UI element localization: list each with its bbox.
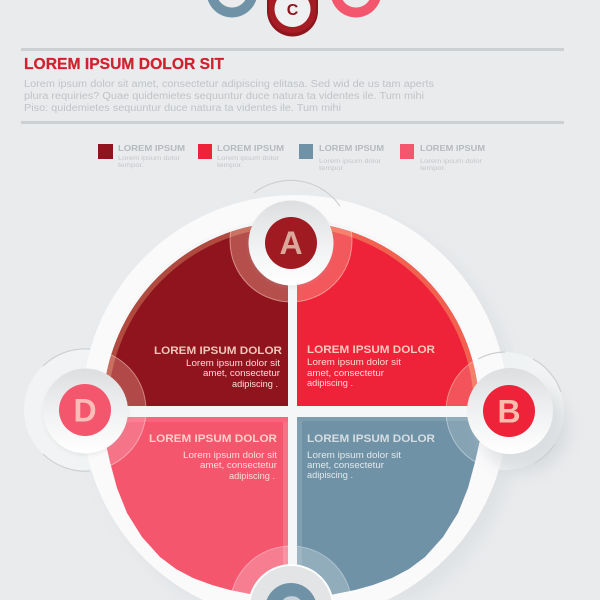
panel text: dark red bbox=[154, 345, 282, 389]
panel text: dark red: amet, consectetur bbox=[203, 368, 280, 378]
legend item: blue: Lorem ipsum dolor bbox=[319, 158, 382, 165]
ring shadow bbox=[93, 205, 519, 600]
panel text: dark red: Lorem ipsum dolor sit bbox=[186, 358, 281, 368]
rule bottom bbox=[21, 121, 564, 124]
legend item: pink bbox=[400, 143, 485, 172]
panel text: red bbox=[307, 344, 435, 388]
panel text: blue: LOREM IPSUM DOLOR bbox=[307, 433, 435, 445]
badge: C: C bbox=[287, 2, 299, 19]
quadrant chart bbox=[103, 222, 482, 600]
legend item: red: LOREM IPSUM bbox=[217, 143, 284, 153]
badge: A bbox=[230, 180, 352, 302]
intro paragraph: Lorem ipsum dolor sit amet, consectetur adipiscing elitasa. Sed wid de us tam aperts bbox=[24, 79, 434, 90]
quadrant: pink bbox=[103, 417, 288, 600]
intro paragraph: Piso: quidemietes sequuntur duce natura ta videntes ile. Tum mihi bbox=[24, 103, 341, 114]
panel text: dark red: adipiscing . bbox=[232, 379, 278, 389]
top partial badges bbox=[208, 0, 380, 36]
title: LOREM IPSUM DOLOR SIT bbox=[24, 56, 224, 73]
panel text: pink: adipiscing . bbox=[229, 471, 275, 481]
legend item: red bbox=[198, 143, 284, 169]
legend item: dark red: Lorem ipsum dolor bbox=[118, 155, 181, 162]
badge: B: B bbox=[497, 394, 521, 430]
panel text: pink bbox=[149, 433, 278, 481]
quadrant: blue bbox=[297, 417, 482, 600]
panel text: blue: amet, consectetur bbox=[307, 460, 384, 470]
legend item: dark red bbox=[98, 143, 185, 169]
intro paragraph: plura requiries? Quae quidemietes sequuntur duce natura ta videntes ile. Tum mihi bbox=[24, 91, 424, 102]
legend item: blue: tempor. bbox=[319, 165, 345, 172]
panel text: red: LOREM IPSUM DOLOR bbox=[307, 344, 435, 356]
rule top bbox=[21, 48, 564, 51]
badge ring: blue bbox=[208, 0, 256, 17]
badge: D: D bbox=[73, 392, 97, 428]
panel text: red: Lorem ipsum dolor sit bbox=[307, 357, 402, 367]
legend item: pink: tempor. bbox=[420, 165, 446, 172]
panel text: blue: Lorem ipsum dolor sit bbox=[307, 450, 402, 460]
badge: C bottom bbox=[230, 546, 352, 600]
legend item: red: tempor. bbox=[217, 162, 243, 169]
badge: D bbox=[42, 348, 146, 472]
legend bbox=[98, 143, 485, 172]
legend item: red: Lorem ipsum dolor bbox=[217, 155, 280, 162]
quadrant: dark red bbox=[103, 222, 288, 406]
panel text: red: adipiscing . bbox=[307, 378, 353, 388]
panel text: blue: adipiscing . bbox=[307, 470, 353, 480]
panel text: pink: LOREM IPSUM DOLOR bbox=[149, 433, 277, 445]
legend item: dark red: tempor. bbox=[118, 162, 144, 169]
intro paragraph bbox=[24, 79, 434, 114]
badge ring: pink bbox=[332, 0, 380, 17]
badge: B bbox=[446, 352, 568, 472]
badge: C bbox=[267, 0, 318, 36]
legend item: pink: LOREM IPSUM bbox=[420, 143, 485, 153]
panel text: blue bbox=[307, 433, 435, 480]
panel text: pink: Lorem ipsum dolor sit bbox=[183, 450, 278, 460]
panel text: dark red: LOREM IPSUM DOLOR bbox=[154, 345, 282, 357]
legend item: pink: Lorem ipsum dolor bbox=[420, 158, 483, 165]
white ring bbox=[82, 195, 508, 600]
legend item: dark red: LOREM IPSUM bbox=[118, 143, 185, 153]
panel text: pink: amet, consectetur bbox=[200, 460, 277, 470]
legend item: blue bbox=[299, 143, 384, 172]
legend item: blue: LOREM IPSUM bbox=[319, 143, 384, 153]
badge: A: A bbox=[279, 225, 303, 261]
quadrant: red bbox=[297, 222, 479, 406]
halo backdrops outside the chart bbox=[24, 349, 564, 471]
panel text: red: amet, consectetur bbox=[307, 368, 384, 378]
